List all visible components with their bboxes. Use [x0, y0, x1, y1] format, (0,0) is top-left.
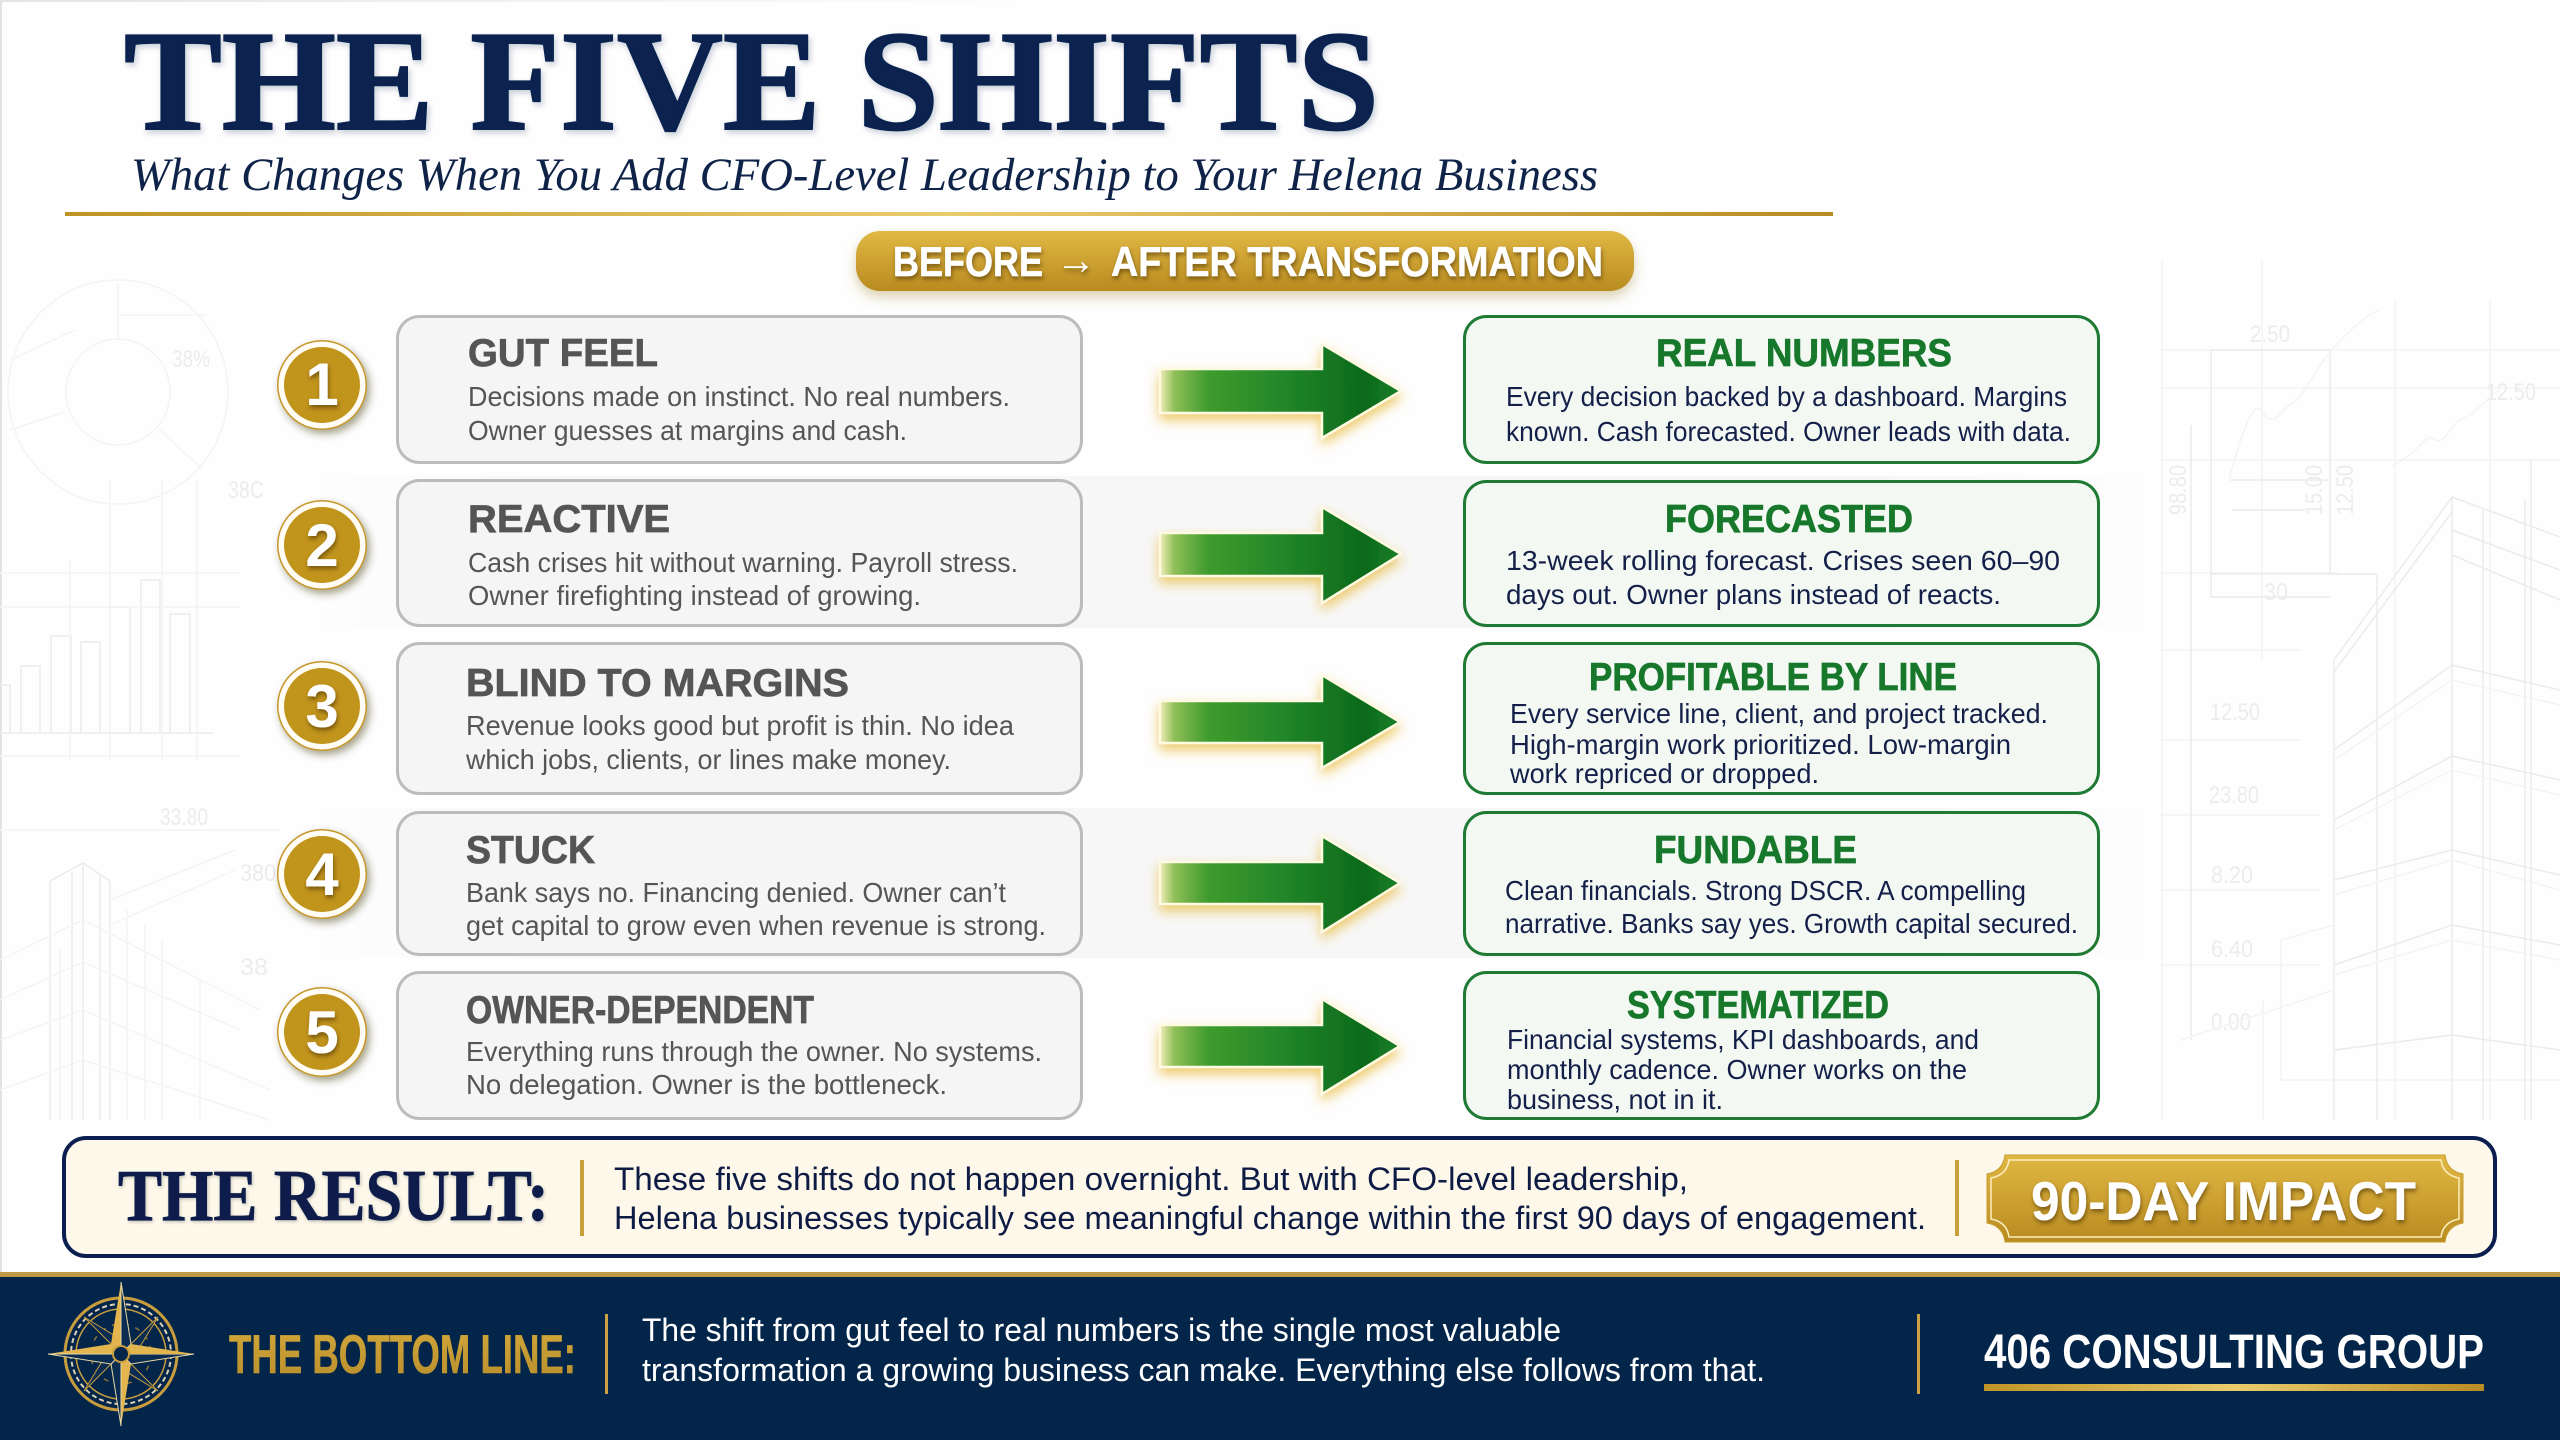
arrow 1: [1160, 344, 1401, 438]
heading: profitable by line: PROFITABLE BY LINE: [1589, 656, 1957, 699]
heading: owner-dependent: OWNER-DEPENDENT: [466, 989, 814, 1032]
text: owner-dependent: [466, 1036, 1042, 1100]
panel: after 5: [1464, 972, 2098, 1118]
number badge 4: 4: [305, 841, 339, 908]
background sketch: blueprint building right: 6.40: [2211, 936, 2253, 963]
background sketch: financial charts left: [0, 280, 280, 1120]
text: bottom line description: [642, 1312, 1765, 1388]
background sketch: financial charts left: 38C: [228, 477, 264, 504]
background sketch: blueprint building right: 2.50: [2250, 321, 2290, 348]
text: result description: Helena businesses typically see meaningful change within the first 90 days of engagement.: [614, 1200, 1926, 1236]
text: owner-dependent: No delegation. Owner is the bottleneck.: [466, 1069, 947, 1100]
panel: before 5: [398, 972, 1082, 1118]
text: result description: [614, 1161, 1926, 1236]
text: systematized: business, not in it.: [1507, 1084, 1723, 1115]
text: stuck: [466, 877, 1046, 941]
badge: 90-day impact: 90-DAY IMPACT: [2031, 1170, 2416, 1232]
text: profitable by line: work repriced or dropped.: [1509, 758, 1819, 789]
text: fundable: Clean financials. Strong DSCR. A compelling: [1505, 875, 2026, 906]
text: systematized: [1507, 1024, 1979, 1115]
heading: the bottom line: THE BOTTOM LINE:: [229, 1323, 576, 1385]
text: real numbers: known. Cash forecasted. Owner leads with data.: [1506, 416, 2071, 447]
heading: the result: THE RESULT:: [118, 1155, 549, 1236]
background sketch: blueprint building right: 15.00: [2301, 465, 2328, 515]
text: systematized: monthly cadence. Owner works on the: [1507, 1054, 1967, 1085]
number badge 5: 5: [305, 999, 339, 1066]
background sketch: blueprint building right: 12.50: [2210, 699, 2260, 726]
text: real numbers: Every decision backed by a dashboard. Margins: [1506, 381, 2067, 412]
heading: real numbers: REAL NUMBERS: [1656, 332, 1952, 375]
number badge 2: 2: [305, 512, 339, 579]
arrow 3: [1160, 675, 1400, 768]
text: reactive: Owner firefighting instead of growing.: [468, 580, 921, 611]
text: gut feel: Owner guesses at margins and cash.: [468, 415, 907, 446]
text: blind to margins: Revenue looks good but profit is thin. No idea: [466, 710, 1014, 741]
text: fundable: [1505, 875, 2078, 939]
footer band: [0, 1272, 2560, 1440]
text: forecasted: days out. Owner plans instead of reacts.: [1506, 579, 2001, 610]
panel: before 1: [398, 316, 1082, 462]
number badge 3: [277, 661, 367, 751]
number badge 5: [277, 987, 367, 1077]
subtitle: What Changes When You Add CFO-Level Leadership to Your Helena Business: [131, 149, 1598, 201]
arrow 5: [1160, 999, 1400, 1094]
banner: before after transformation: [856, 231, 1634, 291]
number badge 1: [277, 340, 367, 430]
text: forecasted: [1506, 545, 2060, 610]
text: bottom line description: transformation a growing business can make. Everything else follows from that.: [642, 1352, 1765, 1388]
arrow 4: [1160, 836, 1400, 932]
background sketch: blueprint building right: 8.20: [2211, 862, 2253, 889]
icon: compass rose: [48, 1282, 194, 1426]
background sketch: financial charts left: 38: [240, 954, 268, 981]
panel: before 3: [398, 644, 1082, 794]
banner: before after transformation: BEFORE: [893, 238, 1043, 285]
banner: before after transformation: →: [1056, 236, 1096, 283]
text: profitable by line: Every service line, client, and project tracked.: [1510, 698, 2048, 729]
arrow 2: [1160, 507, 1401, 603]
heading: blind to margins: BLIND TO MARGINS: [466, 662, 849, 705]
heading: systematized: SYSTEMATIZED: [1627, 984, 1889, 1027]
background sketch: financial charts left: 38%: [172, 346, 210, 373]
text: result description: These five shifts do not happen overnight. But with CFO-level leadership,: [614, 1161, 1688, 1197]
text: reactive: [468, 547, 1018, 611]
heading: stuck: STUCK: [466, 829, 595, 872]
panel: after 2: [1464, 482, 2098, 626]
heading: forecasted: FORECASTED: [1665, 498, 1913, 541]
panel: after 1: [1464, 316, 2098, 462]
background sketch: blueprint building right: 12.50: [2332, 465, 2359, 515]
text: stuck: get capital to grow even when revenue is strong.: [466, 910, 1046, 941]
text: blind to margins: which jobs, clients, or lines make money.: [465, 744, 951, 775]
background sketch: financial charts left: 380: [240, 860, 276, 887]
number badge 2: [277, 500, 367, 590]
banner: before after transformation: AFTER TRANSFORMATION: [1111, 238, 1603, 285]
text: gut feel: Decisions made on instinct. No real numbers.: [468, 381, 1010, 412]
panel: before 4: [398, 812, 1082, 954]
background sketch: blueprint building right: 30: [2264, 579, 2288, 606]
heading: fundable: FUNDABLE: [1654, 829, 1857, 872]
text: blind to margins: [465, 710, 1014, 775]
badge: 90-day impact: [1987, 1155, 2463, 1242]
background sketch: blueprint building right: [2160, 260, 2560, 1120]
text: owner-dependent: Everything runs through the owner. No systems.: [466, 1036, 1042, 1067]
panel: after 3: [1464, 644, 2098, 794]
number badge 4: [277, 829, 367, 919]
panel: after 4: [1464, 812, 2098, 954]
number badge 3: 3: [305, 673, 339, 740]
background sketch: blueprint building right: 12.50: [2486, 379, 2536, 406]
text: systematized: Financial systems, KPI dashboards, and: [1507, 1024, 1979, 1055]
text: real numbers: [1506, 381, 2071, 447]
header gold rule: [65, 212, 1833, 216]
background sketch: blueprint building right: 0.00: [2211, 1009, 2251, 1036]
panel: the result: [64, 1138, 2495, 1256]
panel: before 2: [398, 480, 1082, 626]
text: profitable by line: [1509, 698, 2048, 789]
text: stuck: Bank says no. Financing denied. Owner can’t: [466, 877, 1006, 908]
text: gut feel: [468, 381, 1010, 446]
text: reactive: Cash crises hit without warning. Payroll stress.: [468, 547, 1018, 578]
number badge 1: 1: [305, 351, 339, 418]
text: fundable: narrative. Banks say yes. Growth capital secured.: [1505, 908, 2078, 939]
background sketch: blueprint building right: 98.80: [2165, 465, 2192, 515]
heading: reactive: REACTIVE: [468, 498, 670, 541]
background sketch: blueprint building right: 23.80: [2209, 782, 2259, 809]
text: bottom line description: The shift from gut feel to real numbers is the single most valuable: [642, 1312, 1561, 1348]
row background bands: [300, 476, 2160, 958]
heading: gut feel: GUT FEEL: [468, 332, 658, 375]
text: forecasted: 13-week rolling forecast. Crises seen 60–90: [1506, 545, 2060, 576]
text: profitable by line: High-margin work prioritized. Low-margin: [1510, 729, 2011, 760]
background sketch: financial charts left: 33.80: [160, 804, 208, 831]
title: THE FIVE SHIFTS: [124, 2, 1379, 160]
